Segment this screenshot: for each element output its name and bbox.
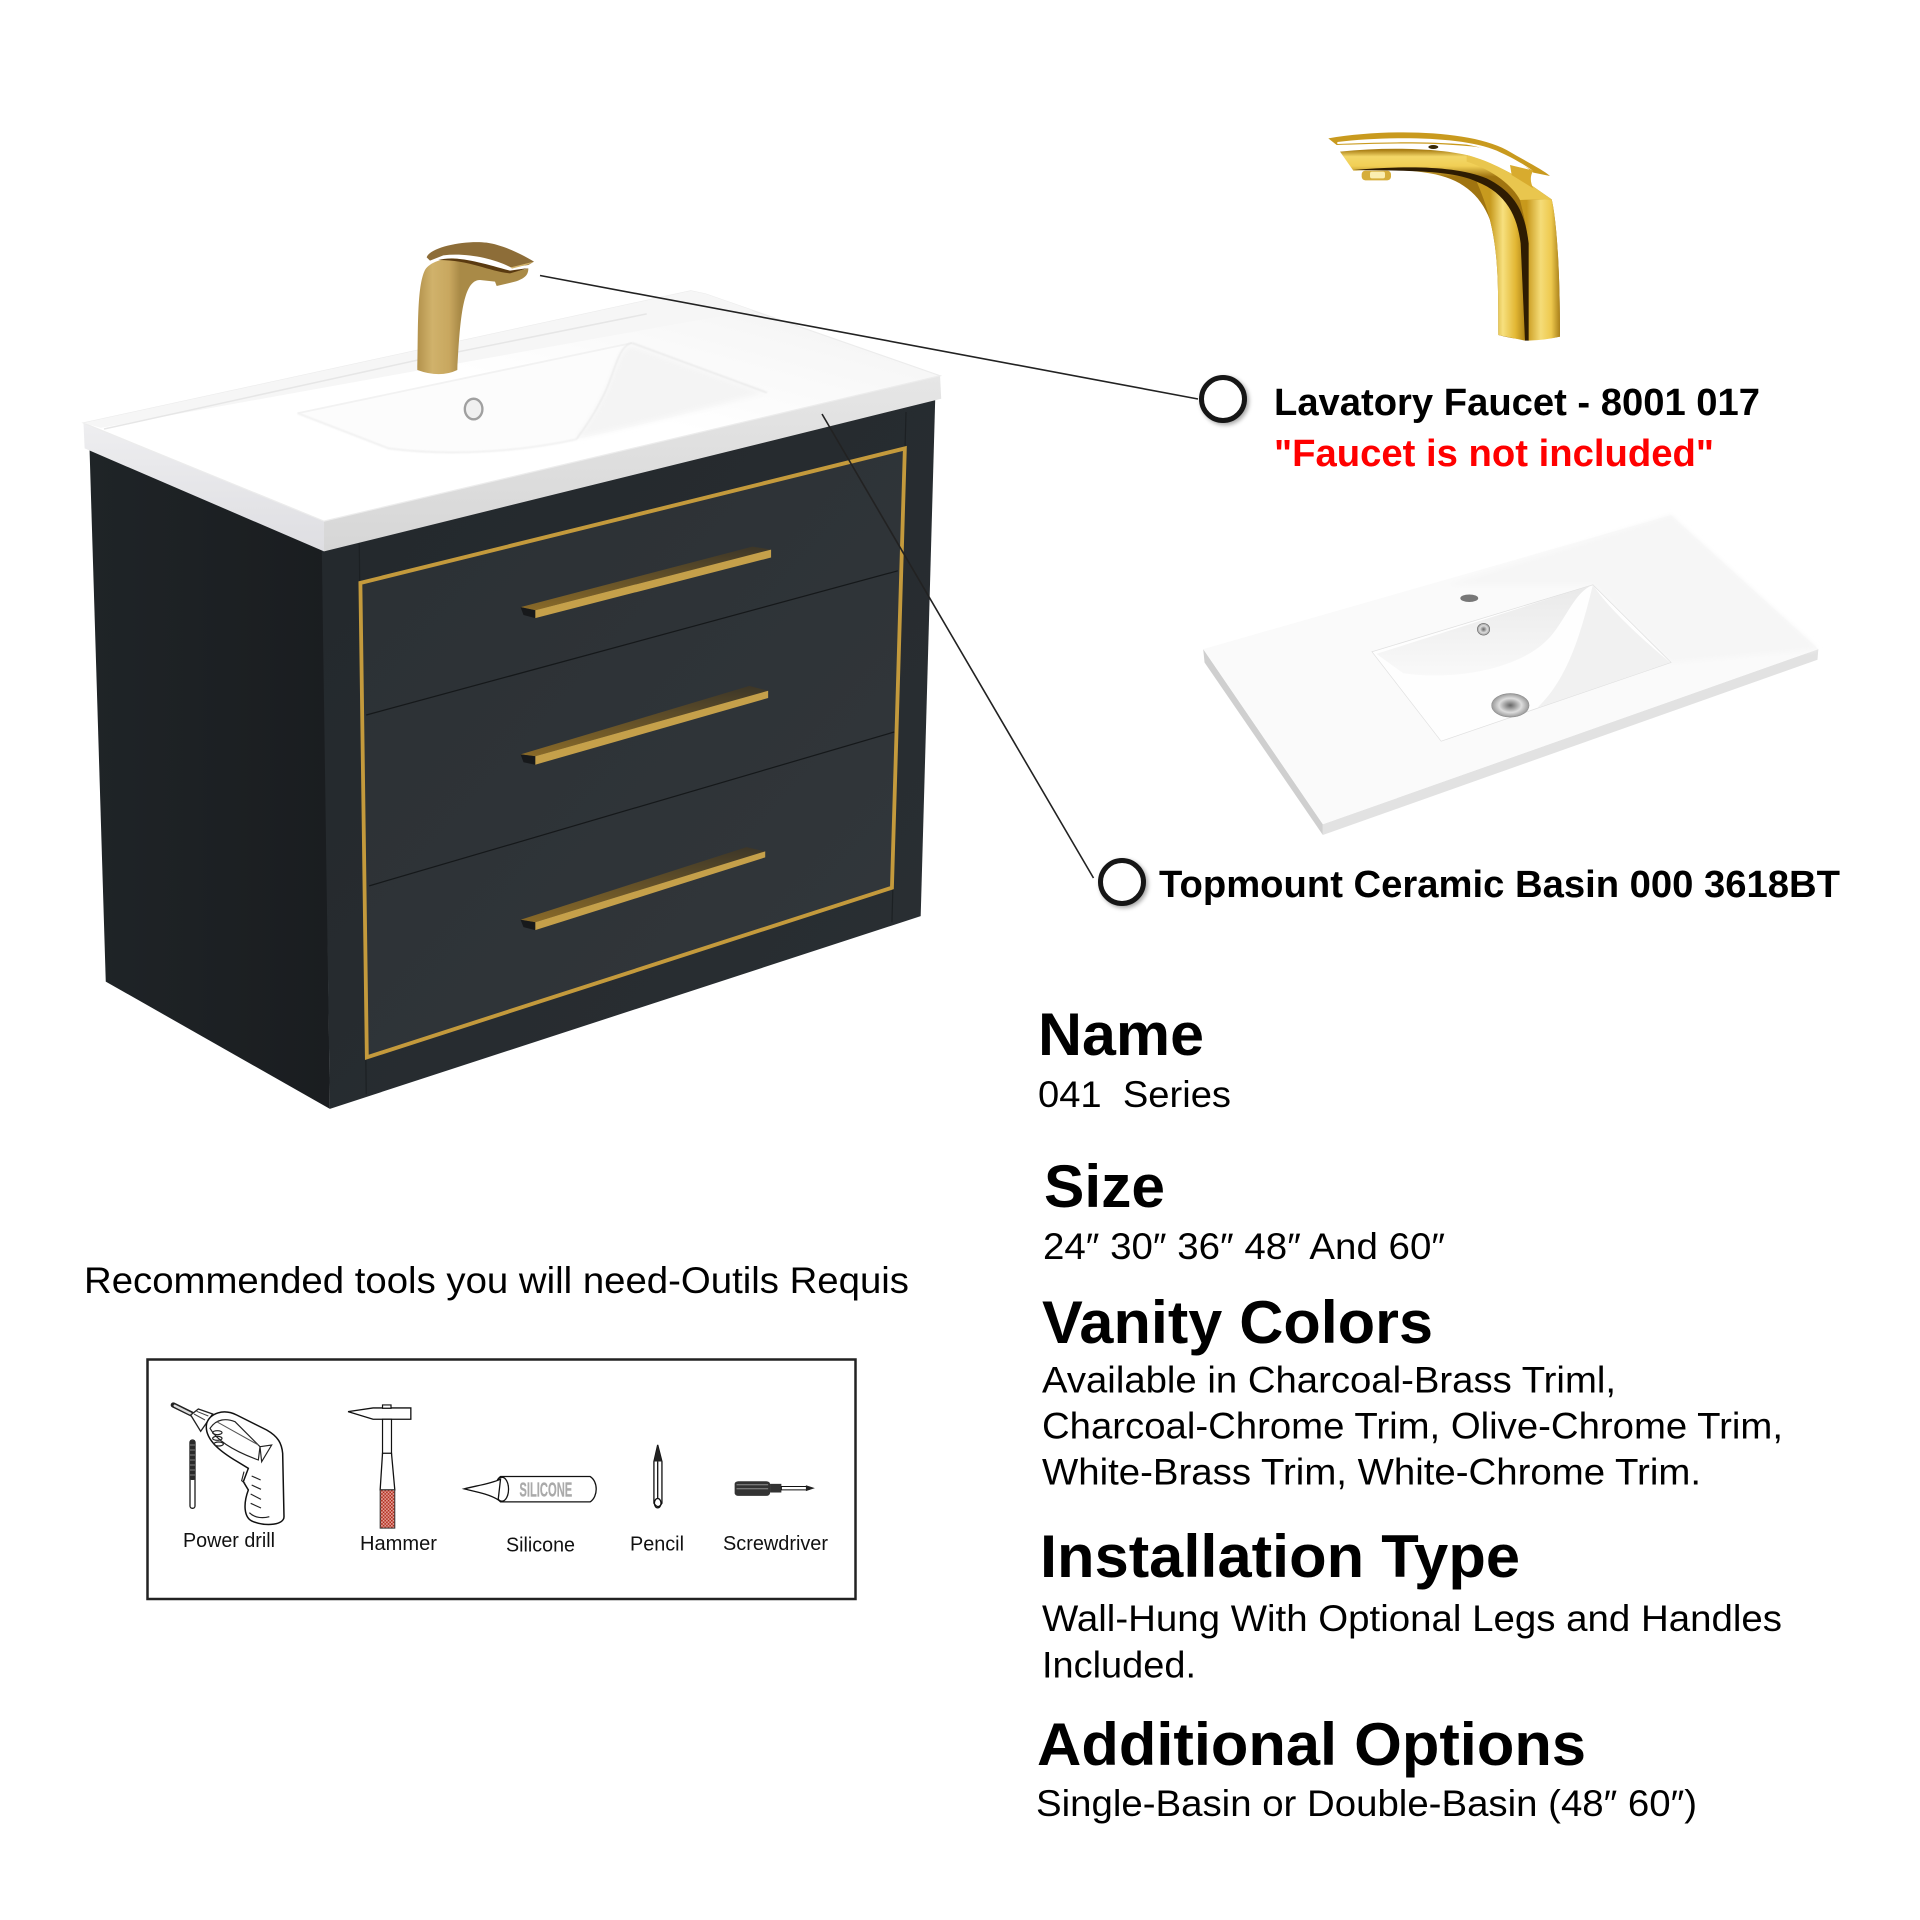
tool labels: Power drill <box>183 1530 275 1552</box>
basin bowl <box>1372 585 1671 741</box>
drawer handle 3 <box>521 847 765 930</box>
callout: basin label: Topmount Ceramic Basin 000 3618BT <box>1159 864 1840 906</box>
spec: installation type: Wall-Hung With Optional Legs and Handles <box>1042 1598 1782 1639</box>
callout: faucet label: Lavatory Faucet - 8001 017 <box>1274 382 1760 424</box>
leader line: basin <box>822 414 1094 878</box>
spout and column <box>1340 149 1560 340</box>
brass faucet on vanity <box>417 242 534 374</box>
panel frame <box>148 1360 856 1599</box>
tool labels: Hammer <box>360 1533 437 1555</box>
drawer dividers <box>366 571 898 886</box>
cabinet front panel <box>322 394 935 1109</box>
lever blade <box>1328 132 1550 176</box>
ceramic top slab <box>83 291 941 551</box>
aerator <box>1362 171 1391 180</box>
callout: faucet label: "Faucet is not included" <box>1274 433 1714 475</box>
spec: name <box>1038 1001 1231 1115</box>
spec: name: 041 Series <box>1038 1074 1231 1115</box>
spec: vanity colors: Available in Charcoal-Brass Triml, <box>1042 1360 1616 1400</box>
spec: size: 24″ 30″ 36″ 48″ And 60″ <box>1043 1226 1445 1267</box>
tool labels: Pencil <box>630 1534 684 1556</box>
tool labels: Screwdriver <box>723 1533 828 1555</box>
spec: vanity colors: Charcoal-Chrome Trim, Olive-Chrome Trim, <box>1042 1406 1783 1446</box>
faucet product photo <box>1328 132 1560 341</box>
cabinet side panel <box>89 442 330 1109</box>
icon: silicone tube <box>464 1477 596 1502</box>
spec: additional options <box>1036 1711 1697 1824</box>
ceramic basin product photo <box>1203 515 1818 835</box>
gold trim <box>360 448 905 1057</box>
icon: pencil <box>654 1445 662 1508</box>
spec: name: Name <box>1038 1001 1204 1068</box>
drain <box>1492 694 1529 717</box>
icon: silicone tube: SILICONE <box>519 1479 572 1501</box>
drawers area <box>360 448 905 1057</box>
icon: hammer <box>348 1405 411 1528</box>
spec: additional options: Single-Basin or Double-Basin (48″ 60″) <box>1036 1783 1697 1824</box>
icon: power drill <box>173 1405 284 1524</box>
spec: installation type <box>1040 1523 1782 1686</box>
drawer handle 1 <box>521 547 771 618</box>
spec: vanity colors <box>1042 1289 1783 1492</box>
spec: additional options: Additional Options <box>1037 1711 1586 1778</box>
spec: installation type: Installation Type <box>1040 1523 1520 1590</box>
tools heading: Recommended tools you will need-Outils Requis <box>84 1260 909 1301</box>
vanity cabinet illustration <box>83 291 941 1109</box>
spec: vanity colors: White-Brass Trim, White-Chrome Trim. <box>1042 1452 1701 1492</box>
callout: faucet label <box>1274 382 1760 475</box>
tools panel <box>148 1360 856 1599</box>
callout marker: faucet <box>1202 378 1244 420</box>
back rim <box>83 291 752 428</box>
tool labels <box>183 1530 828 1556</box>
callout marker: basin <box>1100 860 1144 904</box>
spec: installation type: Included. <box>1042 1644 1196 1686</box>
spec: vanity colors: Vanity Colors <box>1042 1289 1433 1356</box>
tool labels: Silicone <box>506 1534 575 1556</box>
overflow hole <box>465 399 482 419</box>
sink bowl <box>298 343 767 452</box>
drawer handle 2 <box>521 686 768 765</box>
leader line: faucet <box>540 276 1198 399</box>
spec: size <box>1043 1153 1445 1267</box>
spec: size: Size <box>1044 1153 1165 1220</box>
icon: screwdriver <box>735 1481 815 1496</box>
